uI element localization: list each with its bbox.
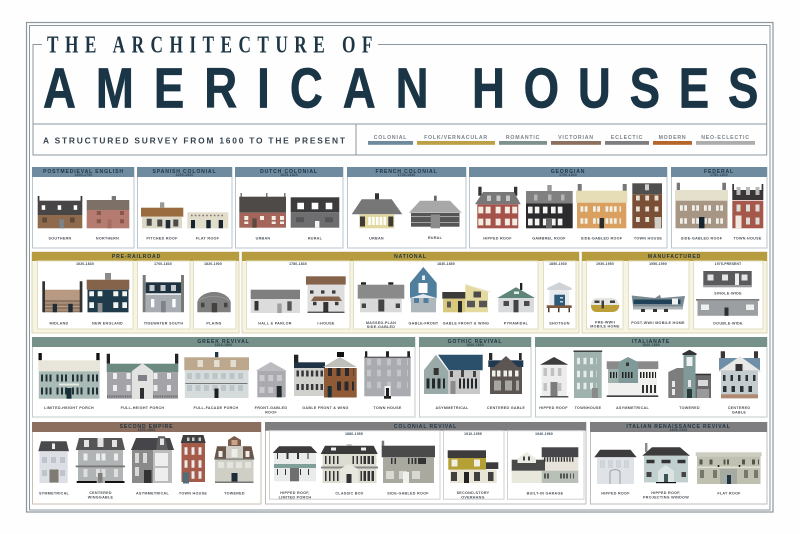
- legend: FOLK/VERNACULAR: [424, 135, 488, 141]
- panel: colonial revival: [265, 422, 586, 504]
- panel: manufactured: 1975-PRESENT: [715, 262, 741, 266]
- panel: french colonial: [347, 167, 466, 248]
- panel: dutch colonial: 1625-1840: [280, 173, 298, 177]
- panel: italianate: 1840-1885: [642, 343, 660, 347]
- panel: manufactured: 1930-1950: [596, 262, 614, 266]
- panel: spanish colonial: [137, 167, 232, 248]
- panel: second empire: [32, 422, 261, 504]
- house: pitched roof: PITCHED ROOF: [146, 236, 178, 240]
- panel: federal: 1780-1830: [710, 173, 728, 177]
- panel: colonial revival: 1940-1960: [535, 432, 553, 436]
- house: second empire asymmetrical: ASYMMETRICAL: [136, 492, 169, 496]
- panel: italian renaissance revival: ITALIAN RENAISSANCE REVIVAL: [626, 424, 731, 430]
- panel: second empire: 1855-1885: [138, 428, 155, 432]
- house: hipped roof limited porch: HIPPED ROOF,: [280, 491, 310, 495]
- house: second-story overhang: OVERHANG: [461, 495, 485, 499]
- house: built-in garage: [512, 447, 578, 496]
- house: georgian town house: [632, 183, 662, 240]
- panel: georgian: GEORGIAN: [551, 169, 585, 175]
- house: italian renaissance flat roof: [696, 452, 762, 496]
- panel: manufactured: [582, 252, 767, 333]
- panel: postmedieval english: 1600-1730: [75, 173, 92, 177]
- panel: colonial revival: COLONIAL REVIVAL: [394, 424, 457, 430]
- house: pyramidal: PYRAMIDAL: [504, 322, 529, 326]
- legend: NEO-ECLECTIC: [701, 135, 750, 141]
- panel: spanish colonial: 1600-1830: [176, 173, 193, 177]
- panel: spanish colonial: SPANISH COLONIAL: [153, 169, 216, 175]
- mobile home: post-wwii: [631, 295, 685, 325]
- mobile home: pre-wwii: MOBILE HOME: [590, 324, 620, 328]
- house: front-gabled roof: ROOF: [265, 410, 277, 414]
- panel: second empire: SECOND EMPIRE: [120, 424, 173, 430]
- panel: gothic revival: GOTHIC REVIVAL: [448, 339, 502, 345]
- house: gable front and wing: GABLE FRONT & WING: [443, 322, 489, 326]
- house: hall and parlor: HALL & PARLOR: [258, 322, 292, 326]
- panel: pre-railroad: 1820-1900: [204, 262, 222, 266]
- house: italianate townhouse: TOWNHOUSE: [575, 406, 602, 410]
- panel: federal: [671, 167, 767, 248]
- house: side-gabled roof colonial revival: [382, 441, 435, 496]
- mobile home: post-wwii: POST-WWII MOBILE HOME: [631, 321, 685, 325]
- house: limited-height porch: [38, 353, 100, 410]
- house: new england: NEW ENGLAND: [92, 322, 123, 326]
- house: second empire towered: [214, 436, 254, 496]
- house: second empire centered wingable: CENTERED: [89, 491, 112, 495]
- house: greek town house: [364, 351, 411, 410]
- panel: pre-railroad: 1620-1830: [76, 262, 94, 266]
- house: southern: SOUTHERN: [49, 236, 72, 240]
- panel: national: 1850-1930: [549, 262, 567, 266]
- panel: dutch colonial: [235, 167, 343, 248]
- house: gable front and wing: [442, 284, 491, 326]
- panel: french colonial: 1700-1830: [398, 173, 415, 177]
- house: italian renaissance hipped roof: HIPPED ROOF: [601, 492, 630, 496]
- house: italianate asymmetrical: [607, 357, 658, 410]
- house: full-facade porch: FULL-FACADE PORCH: [194, 406, 239, 410]
- house: side-gabled roof: SIDE-GABLED ROOF: [581, 236, 623, 240]
- house: italianate hipped roof: [539, 357, 568, 410]
- panel: national: [242, 252, 579, 333]
- panel: federal: FEDERAL: [704, 169, 734, 175]
- panel: manufactured: 1950-1990: [649, 262, 667, 266]
- house: italianate asymmetrical: ASYMMETRICAL: [616, 406, 649, 410]
- panel: postmedieval english: POSTMEDIEVAL ENGLISH: [43, 169, 124, 175]
- house: full-height porch: FULL-HEIGHT PORCH: [121, 406, 164, 410]
- panel: greek revival: 1825-1860: [215, 343, 232, 347]
- legend: ECLECTIC: [611, 135, 643, 141]
- house: italianate centered gable: GABLE: [732, 410, 746, 414]
- panel: italian renaissance revival: [590, 422, 767, 504]
- mobile home: pre-wwii: [590, 298, 620, 328]
- house: italianate towered: TOWERED: [679, 406, 700, 410]
- house: second empire centered wingable: WINGGABLE: [88, 495, 113, 499]
- house: built-in garage: BUILT-IN GARAGE: [527, 492, 564, 496]
- legend: COLONIAL: [374, 135, 407, 141]
- house: italian renaissance projecting window: [642, 443, 690, 499]
- house: side-gabled roof: [576, 184, 627, 240]
- house: dutch rural: RURAL: [308, 236, 323, 240]
- panel: gothic revival: [419, 337, 531, 417]
- panel: manufactured: MANUFACTURED: [648, 254, 701, 260]
- mobile home: double-wide: [696, 299, 759, 326]
- house: french urban: URBAN: [369, 236, 384, 240]
- house: greek town house: TOWN HOUSE: [373, 406, 402, 410]
- house: italianate hipped roof: HIPPED ROOF: [539, 406, 568, 410]
- legend: [368, 135, 755, 145]
- title: the architecture of: THE ARCHITECTURE OF: [47, 31, 372, 58]
- panel: national: 1830-1850: [437, 262, 455, 266]
- mobile home: pre-wwii: PRE-WWII: [595, 320, 615, 324]
- panel: gothic revival: 1840-1880: [466, 343, 484, 347]
- panel: italianate: ITALIANATE: [632, 339, 670, 345]
- house: classic box: [321, 444, 378, 496]
- panel: pre-railroad: [32, 252, 239, 333]
- panel: national: 1780-1830: [289, 262, 307, 266]
- legend: VICTORIAN: [558, 135, 594, 141]
- house: plains: PLAINS: [206, 322, 222, 326]
- house: pyramidal: [497, 283, 535, 326]
- house: italianate centered gable: CENTERED: [728, 406, 750, 410]
- house: plains: [197, 292, 231, 326]
- house: federal town house: TOWN HOUSE: [733, 236, 762, 240]
- house: french rural: RURAL: [428, 236, 443, 240]
- house: i-house: [306, 276, 346, 326]
- house: gothic asymmetrical: ASYMMETRICAL: [435, 406, 469, 410]
- panel: greek revival: [32, 337, 415, 417]
- house: midland: MIDLAND: [50, 322, 69, 326]
- house: italianate centered gable: [717, 351, 762, 414]
- panel: georgian: 1700-1830: [559, 173, 577, 177]
- panel: greek revival: GREEK REVIVAL: [197, 339, 250, 345]
- panel: postmedieval english: [32, 167, 134, 248]
- house: tidewater south: TIDEWATER SOUTH: [144, 322, 183, 326]
- house: federal side-gabled roof: SIDE-GABLED ROOF: [681, 236, 723, 240]
- house: second empire centered wingable: [76, 438, 125, 499]
- mobile home: single-wide: [703, 271, 752, 296]
- house: italian renaissance flat roof: FLAT ROOF: [717, 492, 741, 496]
- panel: dutch colonial: DUTCH COLONIAL: [260, 169, 318, 175]
- panel: colonial revival: 1880-1955: [345, 432, 363, 436]
- panel: italianate: [535, 337, 767, 417]
- house: hipped roof: [475, 187, 521, 240]
- panel: pre-railroad: PRE-RAILROAD: [112, 254, 161, 260]
- house: second empire symmetrical: [38, 441, 70, 496]
- legend: ROMANTIC: [506, 135, 540, 141]
- house: gable-front: GABLE-FRONT: [409, 322, 439, 326]
- house: new england: [87, 273, 129, 326]
- house: gambrel roof: GAMBREL ROOF: [532, 236, 566, 240]
- house: shotgun: [547, 282, 572, 326]
- title: american houses: AMERICAN: [43, 56, 429, 120]
- house: front-gabled roof: [255, 362, 287, 414]
- panel: pre-railroad: 1700-1830: [154, 262, 172, 266]
- house: second-story overhang: SECOND-STORY: [457, 491, 490, 495]
- house: second empire town house: TOWN HOUSE: [179, 492, 207, 496]
- house: second empire town house: [179, 435, 207, 496]
- house: massed-plan side-gabled: SIDE-GABLED: [367, 325, 395, 329]
- house: hall and parlor: [251, 290, 300, 326]
- header block: [33, 31, 767, 155]
- house: italian renaissance projecting window: HIPPED ROOF,: [651, 491, 681, 495]
- house: tidewater south: [143, 275, 184, 326]
- panel: italian renaissance revival: 1890-1935: [670, 428, 687, 432]
- house: midland: [42, 281, 82, 326]
- house: classic box: CLASSIC BOX: [335, 492, 364, 496]
- house: front-gabled roof: FRONT-GABLED: [255, 406, 287, 410]
- house: full-height porch: [107, 354, 178, 410]
- house: hipped roof limited porch: LIMITED PORCH: [279, 495, 311, 499]
- legend: MODERN: [659, 135, 686, 141]
- house: full-facade porch: [184, 352, 249, 410]
- house: shotgun: SHOTGUN: [549, 322, 570, 326]
- house: hipped roof limited porch: [273, 446, 317, 499]
- mobile home: double-wide: DOUBLE-WIDE: [713, 322, 743, 326]
- house: massed-plan side-gabled: MASSED-PLAN: [366, 321, 396, 325]
- house: gambrel roof: [526, 185, 573, 240]
- house: northern: NORTHERN: [96, 236, 119, 240]
- house: flat roof: FLAT ROOF: [196, 236, 220, 240]
- house: georgian town house: TOWN HOUSE: [634, 236, 662, 240]
- house: second-story overhang: [448, 450, 498, 499]
- mobile home: single-wide: SINGLE-WIDE: [714, 292, 742, 296]
- panel: french colonial: FRENCH COLONIAL: [376, 169, 438, 175]
- house: i-house: I-HOUSE: [317, 322, 335, 326]
- house: side-gabled roof colonial revival: SIDE-GABLED ROOF: [387, 492, 429, 496]
- house: limited-height porch: LIMITED-HEIGHT PORCH: [44, 406, 94, 410]
- house: italian renaissance hipped roof: [594, 450, 637, 496]
- house: gable front and wing greek: [294, 352, 357, 410]
- house: hipped roof: HIPPED ROOF: [483, 236, 512, 240]
- house: second empire asymmetrical: [131, 436, 174, 496]
- house: italian renaissance projecting window: PROJECTING WINDOW: [643, 495, 689, 499]
- house: gable front and wing greek: GABLE FRONT & WING: [302, 406, 349, 410]
- house: massed-plan side-gabled: [358, 282, 404, 329]
- subtitle: A STRUCTURED SURVEY FROM 1600 TO THE PRESENT: [43, 135, 346, 145]
- house: second empire symmetrical: SYMMETRICAL: [39, 492, 70, 496]
- house: italianate townhouse: [574, 350, 602, 410]
- panel: colonial revival: 1910-1955: [464, 432, 482, 436]
- house: gothic centered gable: CENTERED GABLE: [487, 406, 525, 410]
- title: american houses: [43, 56, 758, 120]
- panel: georgian: [469, 167, 667, 248]
- house: second empire towered: TOWERED: [224, 492, 245, 496]
- house: italianate towered: [668, 350, 711, 410]
- panel: national: NATIONAL: [394, 254, 427, 260]
- title: american houses: HOUSES: [472, 56, 758, 120]
- house: gable-front: [409, 267, 439, 326]
- house: dutch urban: URBAN: [256, 236, 270, 240]
